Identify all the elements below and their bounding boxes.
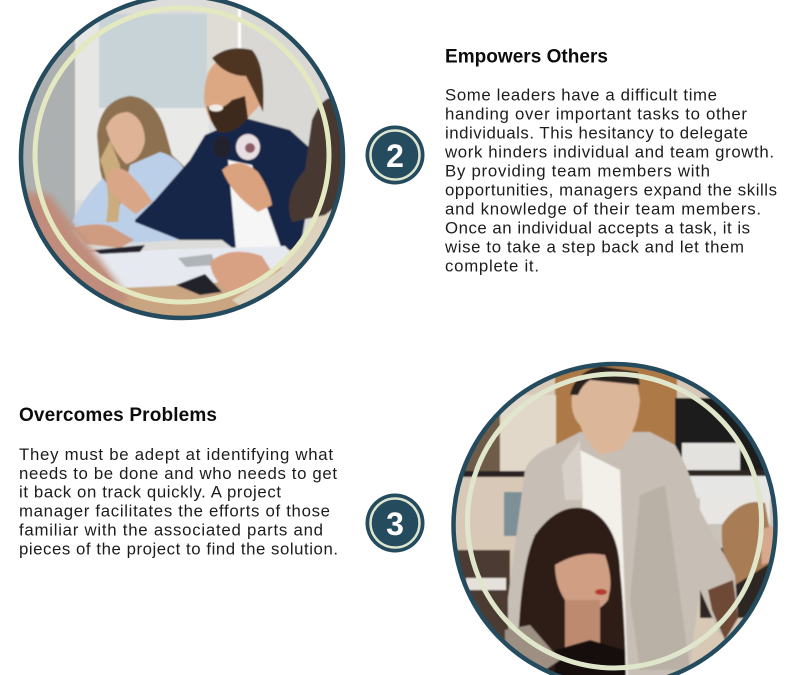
woman's hair [518, 508, 626, 675]
text block: Empowers Others body: work hinders individual and team growth. [444, 142, 774, 162]
man's raised hand [222, 163, 272, 212]
text block: Empowers Others body: and knowledge of their team members. [445, 200, 761, 218]
photo: team laughing around a meeting table [15, 0, 350, 330]
text block: Overcomes Problems body: familiar with the associated parts and [19, 521, 323, 540]
curly hair on the right [289, 98, 345, 222]
woman's hands [106, 168, 152, 214]
text block: Empowers Others body: opportunities, managers expand the skills [445, 180, 777, 200]
woman's face [106, 112, 145, 164]
text block: Empowers Others body: Some leaders have a difficult time [445, 86, 717, 104]
outer ring [21, 0, 343, 318]
text block: Overcomes Problems body: pieces of the project to find the solution. [19, 540, 338, 559]
right background woman [722, 502, 775, 585]
man's head [203, 62, 261, 124]
woman's hair [96, 95, 186, 205]
text block: Empowers Others body [444, 86, 777, 276]
text block: Overcomes Problems body: needs to be done and who needs to get [19, 464, 337, 483]
text block: Overcomes Problems body: manager facilitates the efforts of those [19, 502, 330, 521]
man's jacket [508, 432, 738, 675]
woman's blonde hair lengths [100, 140, 121, 222]
inner ring [468, 374, 762, 668]
outer ring [454, 364, 776, 675]
text block: Overcomes Problems body: it back on track quickly. A project [19, 483, 281, 502]
woman's face [555, 554, 610, 612]
text block: Overcomes Problems body [19, 445, 338, 559]
man's head [572, 372, 640, 455]
woman's shirt [72, 152, 190, 243]
number badge 2: 2 [386, 138, 404, 174]
number badge 2 [366, 126, 424, 184]
number badge 3 [366, 494, 424, 552]
man's watch and hand [708, 580, 738, 640]
photo: manager guiding a colleague in an office [450, 360, 780, 675]
text block: Empowers Others body: complete it. [445, 256, 539, 276]
text block: Empowers Others body: handing over important tasks to other [445, 104, 747, 124]
text block: Empowers Others body: By providing team members with [445, 162, 710, 180]
heading: Empowers Others: Empowers Others [445, 46, 608, 68]
headphones [213, 136, 231, 158]
number badge 3: 3 [386, 506, 404, 542]
blurred shoulder bottom left [26, 188, 128, 304]
text block: Empowers Others body: individuals. This hesitancy to delegate [445, 124, 748, 142]
inner ring [35, 8, 329, 302]
table and papers [88, 248, 292, 316]
text block: Empowers Others body: wise to take a step back and let them [444, 238, 744, 256]
text block: Empowers Others body: Once an individual accepts a task, it is [445, 218, 750, 238]
heading: Overcomes Problems: Overcomes Problems [19, 405, 217, 426]
man's jacket [135, 118, 312, 250]
text block: Overcomes Problems body: They must be adept at identifying what [19, 445, 333, 464]
